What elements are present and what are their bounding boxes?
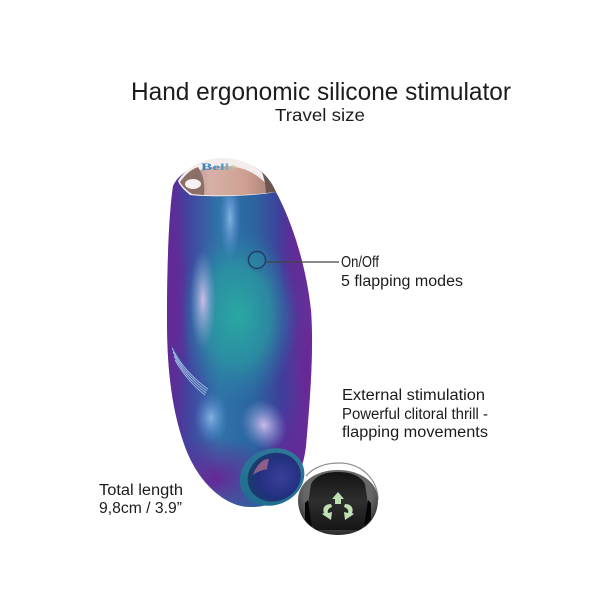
detail inset circle [298,463,378,535]
arrows icon [322,492,354,520]
suction opening [231,439,313,515]
on/off label: On/Off [341,254,380,271]
leader line [265,261,339,263]
on/off button [246,248,270,272]
external stimulation label: Powerful clitoral thrill - [342,406,488,423]
title: Hand ergonomic silicone stimulator [131,78,511,106]
subtitle: Travel size [275,105,365,125]
metal cap with logo [178,158,276,196]
metal cap with logo: Belle [201,162,237,172]
total length label: Total length [99,482,183,499]
external stimulation label: flapping movements [342,424,488,441]
on/off label: 5 flapping modes [341,273,463,290]
external stimulation label: External stimulation [342,387,485,404]
device body [167,166,312,507]
total length label: 9,8cm / 3.9” [99,500,182,517]
grooves [172,345,208,395]
